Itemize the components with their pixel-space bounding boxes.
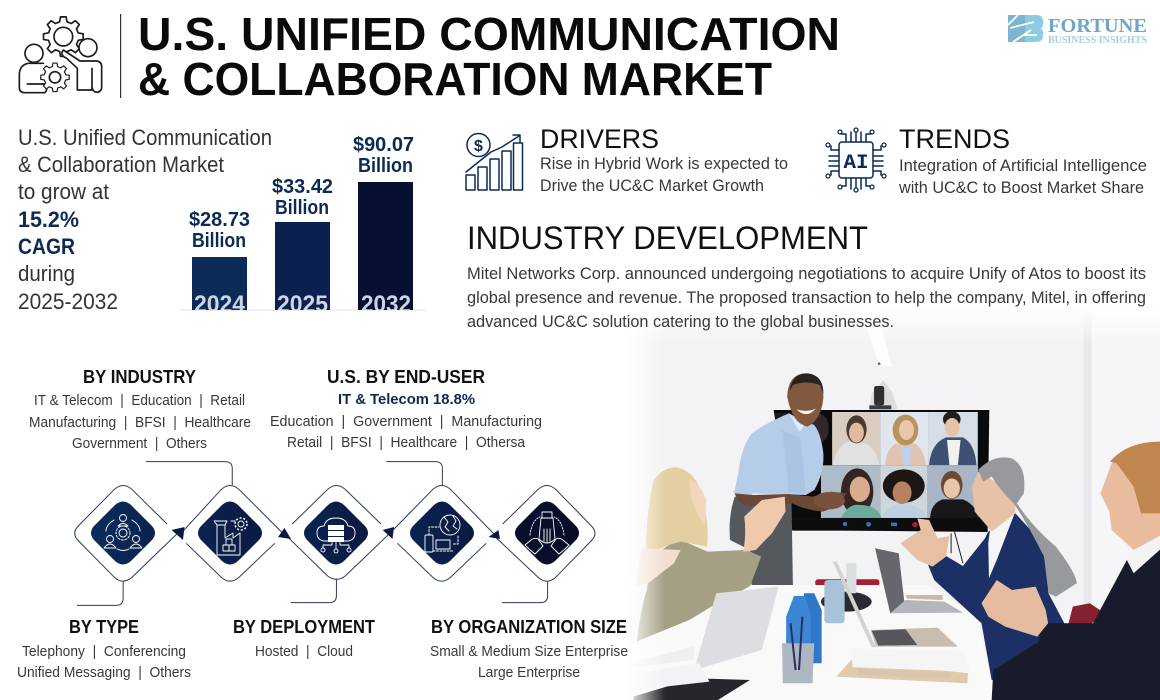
icon: FB mark [1008, 15, 1043, 42]
divider: header [120, 14, 121, 98]
arrow: end-user to organization size [489, 530, 500, 539]
text block: by deployment: Hosted | Cloud [255, 643, 353, 660]
text block: by industry: IT & Telecom | Education | Retail [34, 392, 245, 409]
node: by end-user [410, 502, 474, 564]
text block: by deployment: BY DEPLOYMENT [233, 617, 375, 637]
node: by deployment [304, 502, 368, 564]
text block: trends: TRENDS [899, 124, 1010, 154]
text block: U.S. by end-user [270, 367, 542, 451]
icon: AI chip: AI [844, 152, 868, 175]
text block: by type: Telephony | Conferencing [22, 643, 186, 660]
text block: by type: Unified Messaging | Others [17, 664, 191, 681]
text block: by industry: Government | Others [72, 435, 207, 452]
table [636, 585, 879, 644]
presenter [730, 373, 846, 587]
title: & COLLABORATION MARKET [138, 53, 772, 105]
icon: factory [214, 518, 247, 555]
text block: by type [17, 617, 191, 681]
node: by industry [198, 502, 262, 564]
icon: joined hands [525, 512, 569, 554]
text block: by organization size: Large Enterprise [478, 664, 580, 681]
table items [620, 548, 1105, 700]
icon: drivers growth chart [466, 134, 522, 190]
node: by organization size [515, 502, 579, 564]
icon: globe and devices [425, 515, 460, 552]
text block: trends [898, 124, 1147, 197]
bar: 2025 [272, 176, 333, 318]
bar: 2032: 2032 [361, 291, 411, 318]
text block: market growth summary [18, 125, 272, 314]
text block: market growth summary: to grow at [18, 179, 109, 204]
gray-haired woman [900, 457, 1077, 680]
text block: by industry: BY INDUSTRY [83, 367, 196, 387]
bar chart: market size by year [180, 134, 425, 318]
text block: by industry [29, 367, 251, 452]
bar: 2025: 2025 [277, 291, 328, 318]
text block: U.S. by end-user: IT & Telecom 18.8% [338, 391, 475, 408]
text block: drivers: Drive the UC&C Market Growth [540, 176, 764, 195]
text block: by type: BY TYPE [69, 617, 139, 637]
text block: by deployment [233, 617, 375, 660]
text block: by industry: Manufacturing | BFSI | Healthcare [29, 414, 251, 431]
text block: industry development [467, 264, 1146, 331]
icon: drivers growth chart: $ [474, 138, 483, 155]
bar: 2024: Billion [192, 230, 246, 252]
bar: 2032: $90.07 [353, 134, 414, 156]
text block: drivers: DRIVERS [540, 124, 659, 154]
text block: market growth summary: 15.2% [18, 207, 79, 232]
bar: 2032: Billion [358, 155, 413, 177]
text block: U.S. by end-user: Retail | BFSI | Healthcare | Othersa [287, 434, 526, 451]
text block: market growth summary: during [18, 261, 75, 286]
icon: team circle [104, 514, 142, 550]
text block: U.S. by end-user: Education | Government | Manufacturing [270, 413, 542, 430]
title: U.S. UNIFIED COMMUNICATION [138, 8, 840, 60]
segment flow diagram [75, 462, 595, 605]
blonde woman [635, 467, 785, 643]
text block: industry development: advanced UC&C solution catering to the global businesses. [467, 312, 894, 331]
TV and camera [869, 380, 898, 409]
bar: 2024: $28.73 [189, 209, 250, 231]
text block: trends: with UC&C to Boost Market Share [898, 178, 1144, 197]
arrow: type to industry [172, 527, 184, 540]
icon: cloud server [317, 518, 355, 553]
logo: Fortune Business Insights [1008, 15, 1147, 46]
bar: 2025: Billion [275, 197, 329, 219]
arrow: industry to deployment [278, 528, 291, 539]
text block: market growth summary: & Collaboration Market [18, 152, 224, 177]
heading: industry development: INDUSTRY DEVELOPMENT [467, 220, 868, 256]
arrow: deployment to end-user [383, 527, 394, 539]
node: by type [91, 502, 155, 564]
title [138, 8, 840, 105]
bar: 2024: 2024 [194, 291, 246, 318]
icon: AI chip [826, 128, 886, 192]
logo: Fortune Business Insights: BUSINESS INSIGHTS [1048, 35, 1147, 46]
text block: by organization size: Small & Medium Size Enterprise [430, 643, 628, 660]
bar: 2025: $33.42 [272, 176, 333, 198]
text block: drivers [540, 124, 788, 195]
text block: trends: Integration of Artificial Intelligence [899, 156, 1147, 175]
bar: 2032 [353, 134, 414, 318]
text block: by organization size: BY ORGANIZATION SIZE [431, 617, 627, 637]
text block: U.S. by end-user: U.S. BY END-USER [327, 367, 485, 387]
text block: market growth summary: 2025-2032 [18, 289, 118, 314]
text block: market growth summary: U.S. Unified Communication [18, 125, 272, 150]
bar: 2024 [189, 209, 250, 318]
text block: industry development: global presence and revenue. The proposed transaction to help the company, Mitel, in offering [467, 288, 1146, 307]
text block: by organization size [430, 617, 628, 681]
text block: market growth summary: CAGR [18, 234, 75, 259]
icon: gears and team [19, 17, 102, 93]
man on the right [982, 442, 1160, 700]
text block: industry development: Mitel Networks Corp. announced undergoing negotiations to acquire Unify of Atos to boost its [467, 264, 1146, 283]
photo: team applauding during a video conference [620, 300, 1160, 700]
logo: Fortune Business Insights: FORTUNE [1048, 15, 1147, 37]
text block: drivers: Rise in Hybrid Work is expected to [540, 154, 788, 173]
diamond outlines and connectors [75, 462, 595, 605]
